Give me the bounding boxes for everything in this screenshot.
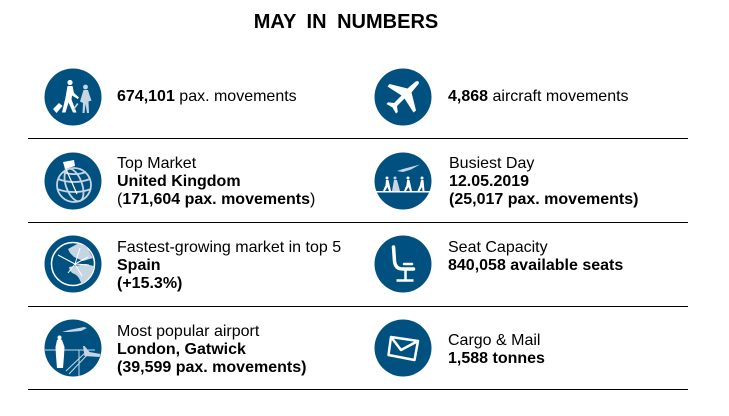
text: fastest-growing market: Spain: [117, 257, 161, 274]
title: MAY IN NUMBERS: [254, 11, 438, 33]
text: busiest day: 12.05.2019: [449, 173, 529, 190]
text: top market: [117, 155, 315, 208]
icon: aircraft: [374, 68, 432, 126]
text: fastest-growing market: [117, 239, 341, 292]
text: cargo and mail: [448, 332, 545, 367]
icon: busiest day: [374, 152, 432, 210]
icon: globe with flag: [44, 152, 102, 210]
text: most popular airport: (39,599 pax. movements): [117, 359, 306, 376]
text: seat capacity: 840,058 available seats: [448, 257, 623, 274]
icon: airport viewer: [44, 320, 102, 376]
text: most popular airport: London, Gatwick: [117, 341, 246, 358]
text: fastest-growing market: Fastest-growing market in top 5: [117, 239, 341, 256]
text: passenger movements: 674,101 pax. movements: [117, 88, 297, 105]
icon: envelope: [374, 320, 432, 376]
text: most popular airport: [117, 323, 306, 376]
text: cargo and mail: Cargo & Mail: [448, 332, 540, 349]
text: aircraft movements: 4,868 aircraft movements: [448, 88, 629, 105]
text: busiest day: (25,017 pax. movements): [449, 191, 638, 208]
icon: passengers walking: [44, 68, 102, 126]
text: seat capacity: [448, 239, 623, 274]
text: top market: Top Market: [117, 155, 196, 172]
text: top market: (171,604 pax. movements): [117, 191, 315, 208]
text: busiest day: Busiest Day: [449, 155, 534, 172]
text: cargo and mail: 1,588 tonnes: [448, 350, 545, 367]
text: most popular airport: Most popular airport: [117, 323, 259, 340]
text: fastest-growing market: (+15.3%): [117, 275, 182, 292]
text: top market: United Kingdom: [117, 173, 241, 190]
icon: globe with routes: [44, 236, 102, 292]
text: busiest day: [449, 155, 638, 208]
text: seat capacity: Seat Capacity: [448, 239, 548, 256]
icon: seat: [374, 236, 432, 292]
